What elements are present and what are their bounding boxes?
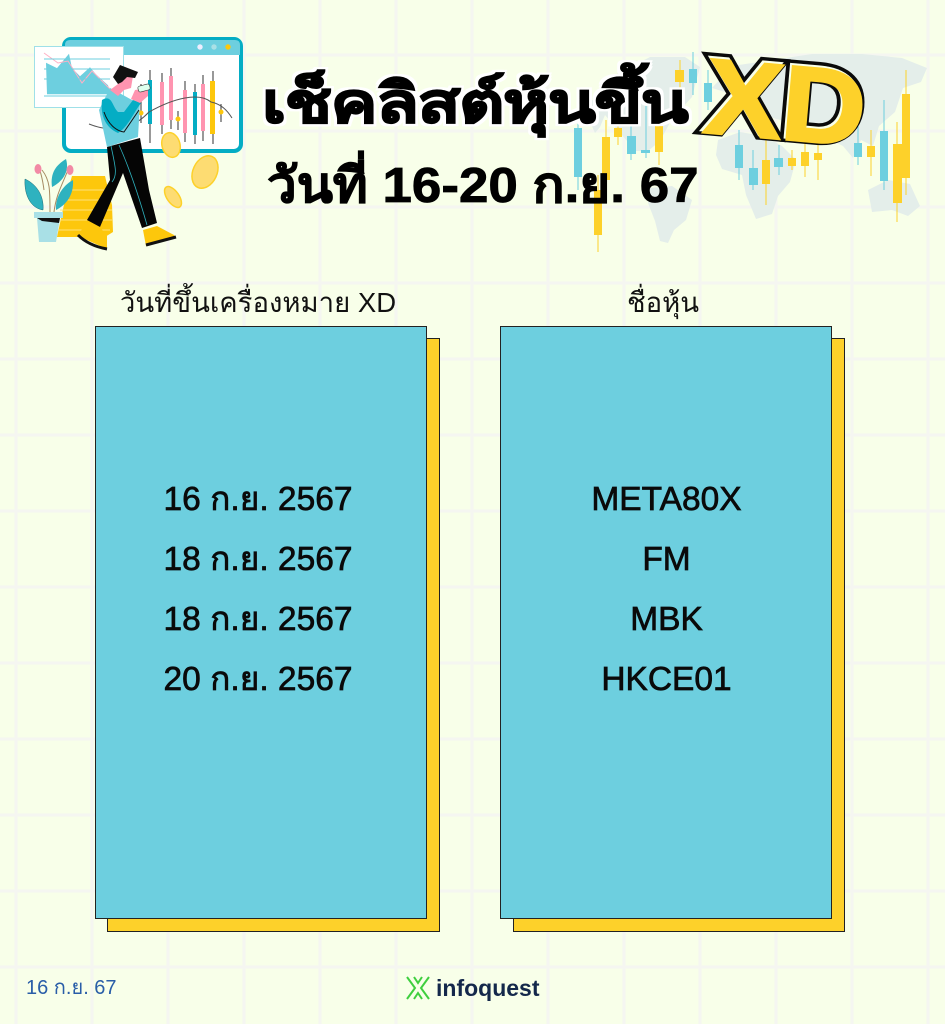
stock list: MBK	[630, 601, 703, 638]
subtitle: วันที่ 16-20 ก.ย. 67	[267, 159, 699, 213]
stock list: HKCE01	[601, 661, 732, 698]
stock list: META80X	[591, 481, 742, 518]
small area chart card	[34, 46, 124, 108]
gold stack	[57, 176, 113, 237]
illustration: investor with chart and coins	[24, 37, 243, 250]
logo: infoquest: infoquest	[436, 975, 540, 1001]
stock list	[591, 481, 742, 698]
date list: 20 ก.ย. 2567	[164, 661, 352, 698]
coins	[159, 131, 223, 210]
date list: 16 ก.ย. 2567	[164, 481, 352, 518]
person	[78, 65, 176, 249]
column heading: stock: ชื่อหุ้น	[627, 287, 699, 318]
browser window with candlesticks	[64, 39, 241, 151]
date list: 18 ก.ย. 2567	[164, 541, 352, 578]
plant	[25, 159, 73, 242]
icon: infoquest mark	[406, 976, 430, 1000]
date list: 18 ก.ย. 2567	[164, 601, 352, 638]
panel: stock names	[500, 326, 845, 932]
title: เช็คลิสต์หุ้นขึ้น	[262, 72, 687, 134]
panel: dates	[95, 326, 440, 932]
footer date: 16 ก.ย. 67	[26, 977, 117, 999]
stock list: FM	[642, 541, 691, 578]
date list	[164, 481, 352, 698]
column heading: date: วันที่ขึ้นเครื่องหมาย XD	[120, 287, 396, 318]
